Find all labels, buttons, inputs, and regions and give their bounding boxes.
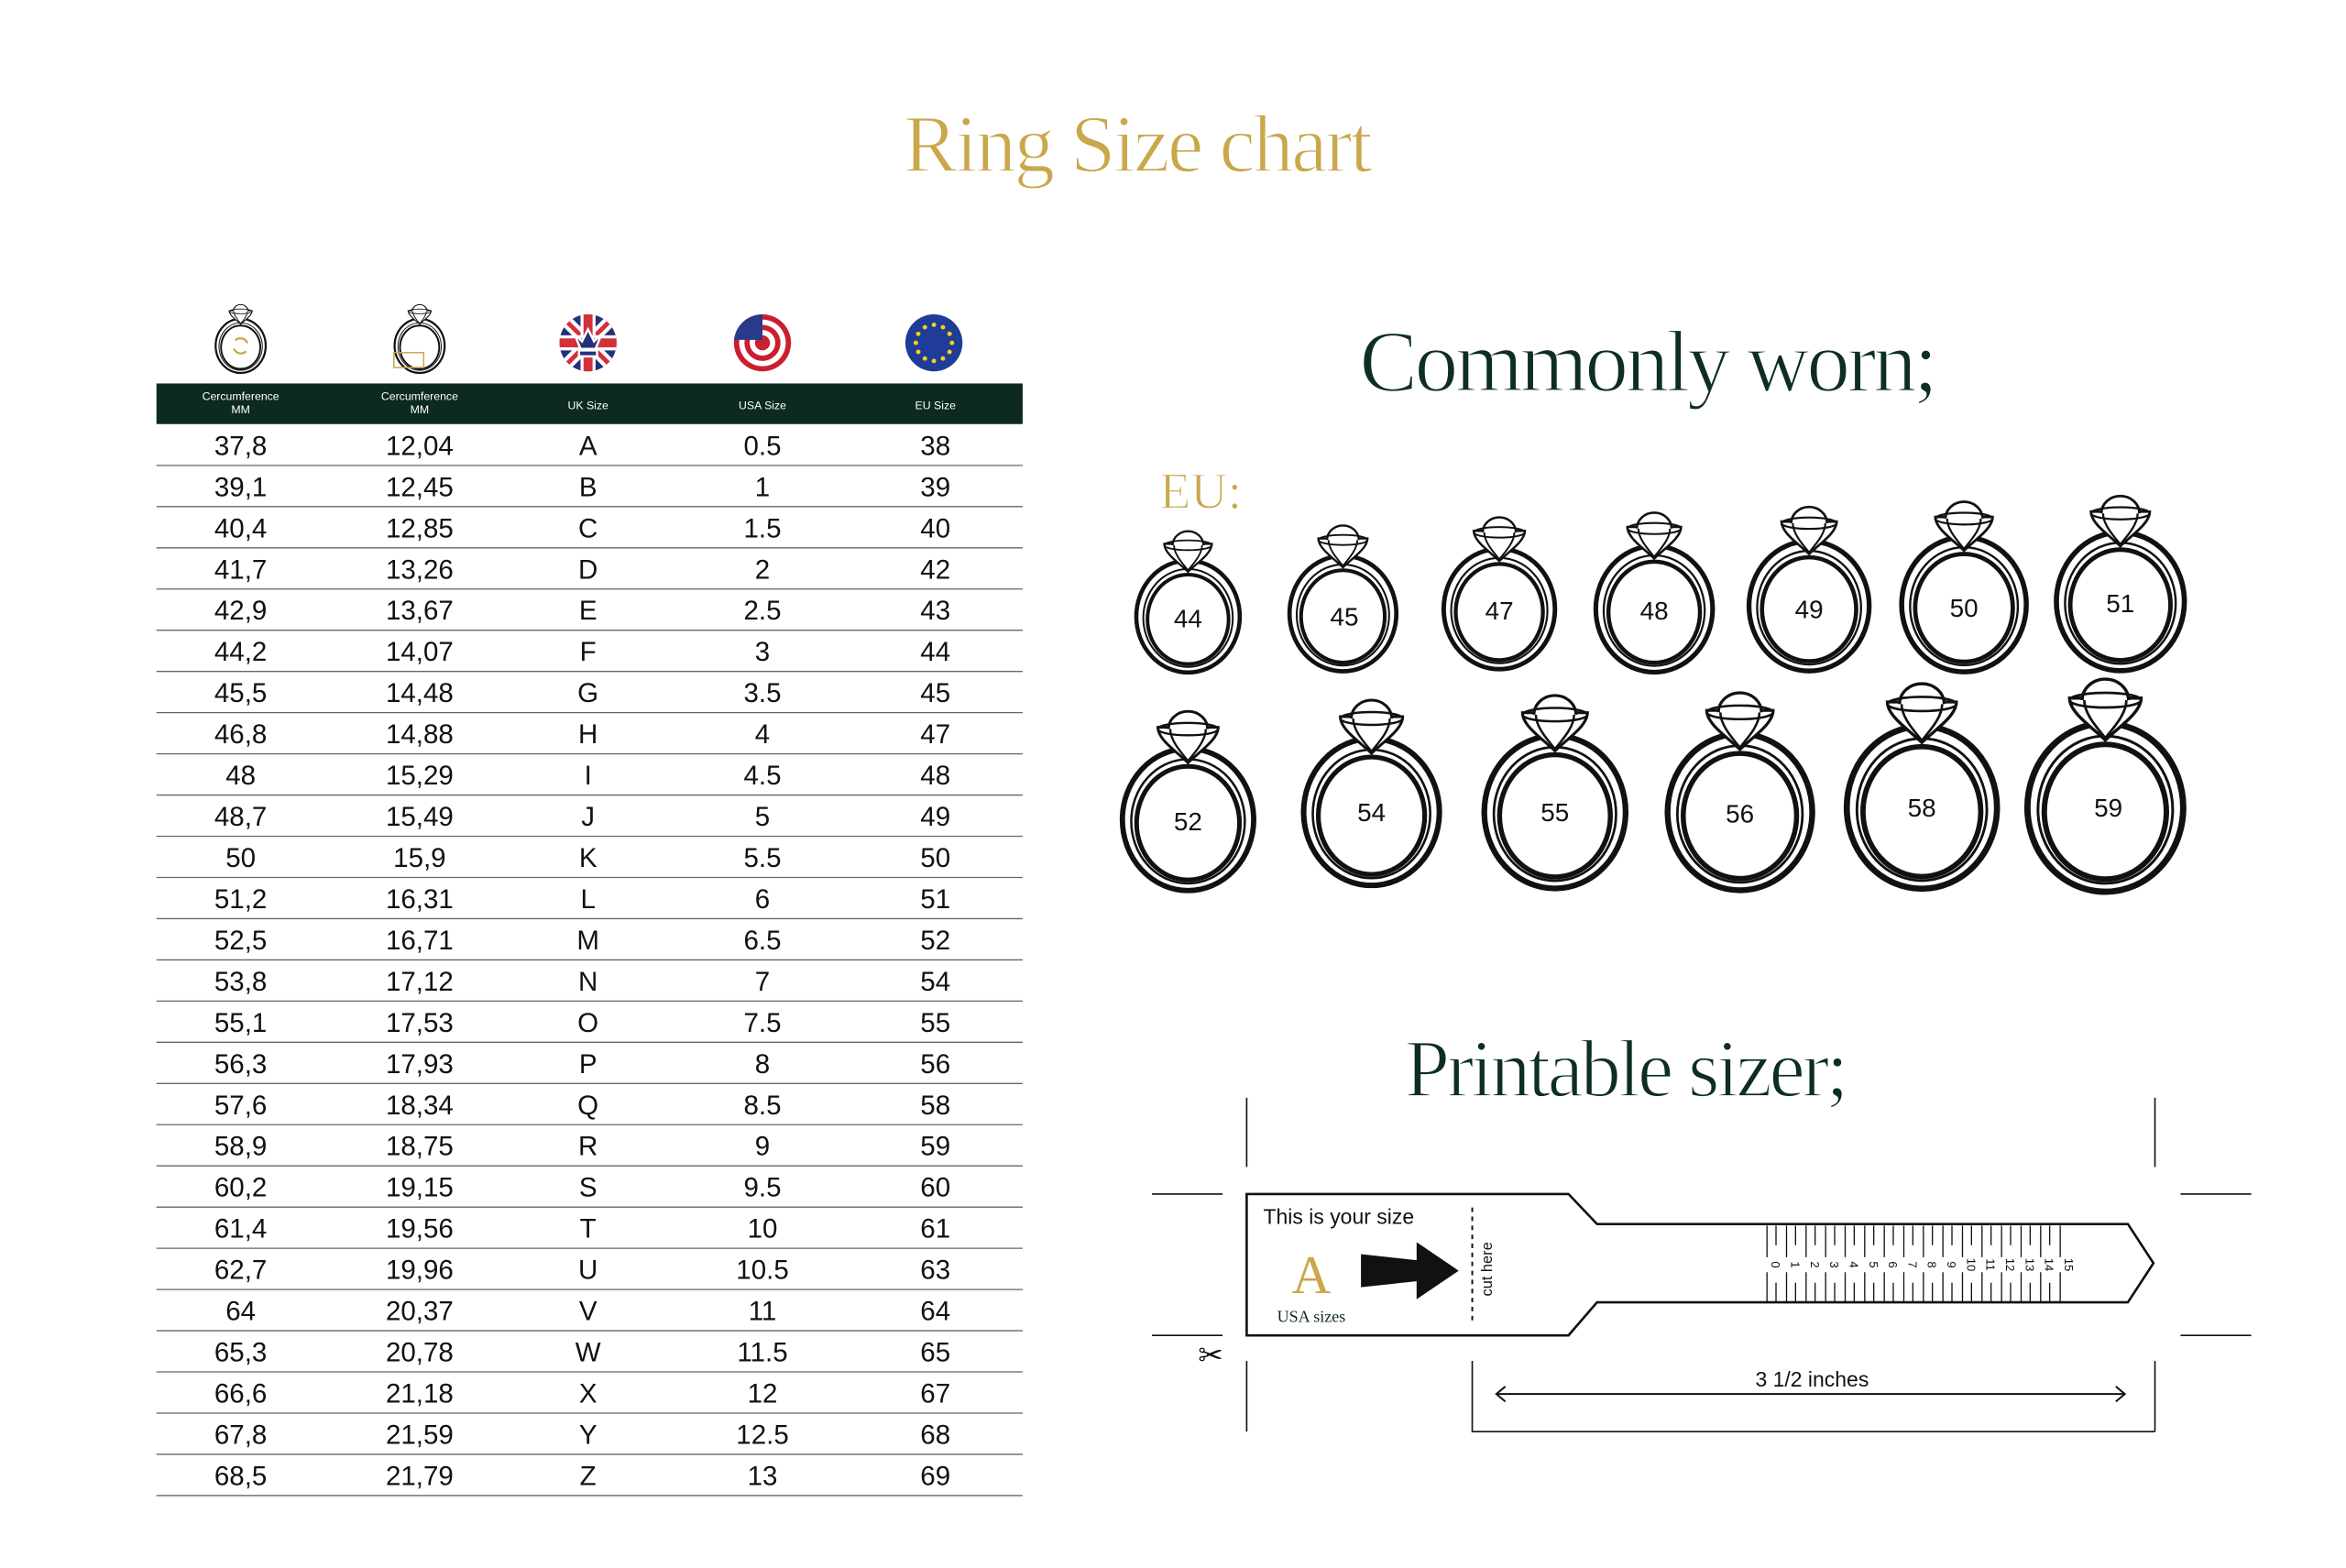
printable sizer: 0	[1769, 1261, 1782, 1268]
table rows: 15,9	[393, 843, 446, 873]
ring sizes: 51	[2106, 589, 2134, 618]
table rows: 15,49	[386, 802, 454, 832]
table rows: 54	[920, 967, 950, 997]
printable sizer: 7	[1905, 1261, 1919, 1268]
table rows: V	[579, 1297, 597, 1327]
table rows: 58	[920, 1091, 950, 1121]
table rows: 47	[920, 719, 950, 750]
ring sizes: 56	[1726, 800, 1754, 828]
table rows: 8.5	[744, 1091, 782, 1121]
table rows: 17,93	[386, 1049, 454, 1080]
table rows: 61	[920, 1214, 950, 1245]
table rows: 68,5	[214, 1461, 267, 1491]
table rows: 2.5	[744, 596, 782, 626]
table rows: 61,4	[214, 1214, 267, 1245]
table rows: 12.5	[736, 1420, 789, 1450]
table rows: 48,7	[214, 802, 267, 832]
table rows	[157, 431, 1023, 1496]
table rows: 13	[748, 1461, 777, 1491]
table rows: 21,59	[386, 1420, 454, 1450]
table rows: E	[579, 596, 597, 626]
table rows: I	[585, 761, 592, 791]
ruler	[1767, 1225, 2060, 1302]
table rows: 20,37	[386, 1297, 454, 1327]
table rows: Z	[580, 1461, 597, 1491]
table rows: 45,5	[214, 678, 267, 708]
printable sizer: 6	[1886, 1261, 1900, 1268]
icon: USA flag	[734, 314, 791, 371]
table rows: 7.5	[744, 1008, 782, 1038]
table rows: 1	[755, 472, 770, 502]
printable sizer: cut here	[1479, 1242, 1496, 1296]
ring sizes: 58	[1908, 794, 1936, 822]
table rows: 11	[749, 1297, 776, 1327]
table rows: 21,79	[386, 1461, 454, 1491]
table rows: F	[580, 637, 597, 667]
table rows: 41,7	[214, 554, 267, 585]
table rows: 10.5	[736, 1255, 789, 1286]
table rows: L	[580, 884, 596, 915]
table rows: H	[578, 719, 597, 750]
ring sizes: 55	[1540, 798, 1569, 827]
table rows: 38	[920, 431, 950, 461]
table rows: S	[579, 1173, 597, 1203]
icon: ring circumference	[215, 304, 266, 373]
ring sizes: 48	[1640, 597, 1669, 625]
printable sizer: This is your size	[1263, 1205, 1414, 1229]
table rows: 6.5	[744, 926, 782, 956]
table rows: U	[578, 1255, 597, 1286]
table rows: 3.5	[744, 678, 782, 708]
table rows: 4.5	[744, 761, 782, 791]
table rows: A	[579, 431, 597, 461]
printable sizer: 13	[2023, 1258, 2036, 1271]
table rows: 60,2	[214, 1173, 267, 1203]
table rows: 56	[920, 1049, 950, 1080]
table rows: K	[579, 843, 597, 873]
ring sizes: 49	[1795, 595, 1824, 623]
table rows: 55	[920, 1008, 950, 1038]
table header: Cercumference	[381, 389, 458, 402]
table header: MM	[231, 403, 250, 416]
printable sizer: 15	[2062, 1258, 2076, 1271]
printable sizer: 9	[1945, 1261, 1958, 1268]
printable sizer: 4	[1847, 1261, 1860, 1268]
table rows: 67,8	[214, 1420, 267, 1450]
table rows: 63	[920, 1255, 950, 1286]
ring sizes: 59	[2094, 794, 2122, 822]
table	[157, 304, 1023, 1496]
table rows: 67	[920, 1378, 950, 1409]
table rows: 48	[920, 761, 950, 791]
table rows: 39	[920, 472, 950, 502]
table rows: 51	[920, 884, 950, 915]
table rows: M	[576, 926, 599, 956]
icon: UK flag	[558, 313, 618, 373]
table rows: 16,31	[386, 884, 454, 915]
table rows: 68	[920, 1420, 950, 1450]
table header: MM	[411, 403, 429, 416]
table rows: 45	[920, 678, 950, 708]
table rows: 17,53	[386, 1008, 454, 1038]
table rows: X	[579, 1378, 597, 1409]
table rows: 46,8	[214, 719, 267, 750]
table header: Cercumference	[203, 389, 280, 402]
table rows: C	[578, 513, 597, 543]
ring sizes: 52	[1174, 807, 1202, 836]
table rows: 55,1	[214, 1008, 267, 1038]
table rows: 14,48	[386, 678, 454, 708]
table rows: Q	[577, 1091, 598, 1121]
table rows: P	[579, 1049, 597, 1080]
table rows: 57,6	[214, 1091, 267, 1121]
table rows: 18,34	[386, 1091, 454, 1121]
table rows: 58,9	[214, 1132, 267, 1162]
table rows: 40,4	[214, 513, 267, 543]
table rows: 51,2	[214, 884, 267, 915]
table rows: 15,29	[386, 761, 454, 791]
table rows: 50	[225, 843, 256, 873]
table rows: N	[578, 967, 597, 997]
table rows: 40	[920, 513, 950, 543]
table rows: 11.5	[737, 1338, 788, 1368]
table rows: 62,7	[214, 1255, 267, 1286]
table rows: 44,2	[214, 637, 267, 667]
ring sizes: 50	[1950, 594, 1979, 622]
table rows: 18,75	[386, 1132, 454, 1162]
table rows: 14,88	[386, 719, 454, 750]
table rows: Y	[579, 1420, 597, 1450]
table rows: 52,5	[214, 926, 267, 956]
table rows: 52	[920, 926, 950, 956]
table rows: B	[579, 472, 597, 502]
table rows: 65	[920, 1338, 950, 1368]
ring sizes: 45	[1331, 603, 1359, 631]
printable sizer: 12	[2003, 1258, 2017, 1271]
table rows: 4	[755, 719, 770, 750]
table header: USA Size	[739, 399, 786, 411]
table rows: 37,8	[214, 431, 267, 461]
table rows: 12,85	[386, 513, 454, 543]
table rows: 64	[920, 1297, 950, 1327]
table rows: 66,6	[214, 1378, 267, 1409]
icon: EU flag	[905, 314, 962, 371]
printable sizer: 8	[1925, 1261, 1939, 1268]
printable sizer: 3 1/2 inches	[1755, 1367, 1869, 1391]
table rows: 42	[920, 554, 950, 585]
table rows: 44	[920, 637, 950, 667]
table rows: D	[578, 554, 597, 585]
table rows: 10	[748, 1214, 777, 1245]
table rows: 60	[920, 1173, 950, 1203]
table rows: 0.5	[744, 431, 782, 461]
table rows: 2	[755, 554, 770, 585]
table rows: 3	[755, 637, 770, 667]
table rows: G	[577, 678, 598, 708]
icon: ring with ruler	[394, 304, 444, 373]
ring sizes: 44	[1174, 604, 1202, 632]
table rows: 19,56	[386, 1214, 454, 1245]
table rows: 19,96	[386, 1255, 454, 1286]
table rows: 9	[755, 1132, 770, 1162]
table rows: 53,8	[214, 967, 267, 997]
table rows: W	[576, 1338, 601, 1368]
table rows: 43	[920, 596, 950, 626]
table rows: 56,3	[214, 1049, 267, 1080]
table rows: 14,07	[386, 637, 454, 667]
heading: commonly worn: Commonly worn;	[1359, 313, 1935, 411]
table rows: 12	[748, 1378, 777, 1409]
table rows: 50	[920, 843, 950, 873]
table rows: 1.5	[744, 513, 782, 543]
printable sizer: 5	[1867, 1261, 1880, 1268]
printable sizer: 2	[1808, 1261, 1822, 1268]
table rows: T	[580, 1214, 597, 1245]
table rows: 59	[920, 1132, 950, 1162]
ring sizes: 47	[1485, 597, 1514, 625]
table rows: 64	[225, 1297, 256, 1327]
table rows: 12,45	[386, 472, 454, 502]
table rows: 21,18	[386, 1378, 454, 1409]
ring sizes	[1123, 496, 2185, 892]
table rows: 16,71	[386, 926, 454, 956]
table rows: 69	[920, 1461, 950, 1491]
table rows: 9.5	[744, 1173, 782, 1203]
printable sizer: USA sizes	[1277, 1307, 1345, 1325]
table rows: 20,78	[386, 1338, 454, 1368]
table rows: 39,1	[214, 472, 267, 502]
ring sizes: 54	[1357, 798, 1386, 827]
label: EU: EU:	[1159, 464, 1242, 521]
table rows: 65,3	[214, 1338, 267, 1368]
table rows: 49	[920, 802, 950, 832]
table header	[157, 383, 1023, 424]
table rows: 13,26	[386, 554, 454, 585]
heading: printable sizer: Printable sizer;	[1405, 1025, 1846, 1114]
table rows: J	[581, 802, 595, 832]
printable sizer	[1152, 1098, 2252, 1431]
table rows: 6	[755, 884, 770, 915]
table rows: 17,12	[386, 967, 454, 997]
table header: UK Size	[567, 399, 608, 411]
icon: logo: A	[1292, 1245, 1332, 1305]
printable sizer: 14	[2043, 1258, 2056, 1271]
table rows: 5.5	[744, 843, 782, 873]
printable sizer: 1	[1788, 1261, 1802, 1268]
title: Ring Size chart	[904, 100, 1373, 190]
table rows: O	[577, 1008, 598, 1038]
table rows: 48	[225, 761, 256, 791]
table rows: 42,9	[214, 596, 267, 626]
table rows: 8	[755, 1049, 770, 1080]
dimension arrow	[1496, 1387, 2125, 1401]
table rows: 7	[755, 967, 770, 997]
table rows: 12,04	[386, 431, 454, 461]
table rows: 19,15	[386, 1173, 454, 1203]
arrow	[1361, 1242, 1459, 1299]
table header: EU Size	[915, 399, 956, 411]
table rows: R	[578, 1132, 597, 1162]
table rows: 5	[755, 802, 770, 832]
printable sizer: 11	[1984, 1258, 1998, 1271]
printable sizer: 10	[1964, 1258, 1978, 1271]
table rows: 13,67	[386, 596, 454, 626]
icon: scissors: ✂	[1198, 1338, 1223, 1372]
printable sizer: 3	[1827, 1261, 1841, 1268]
sizer strip	[1246, 1194, 2154, 1335]
